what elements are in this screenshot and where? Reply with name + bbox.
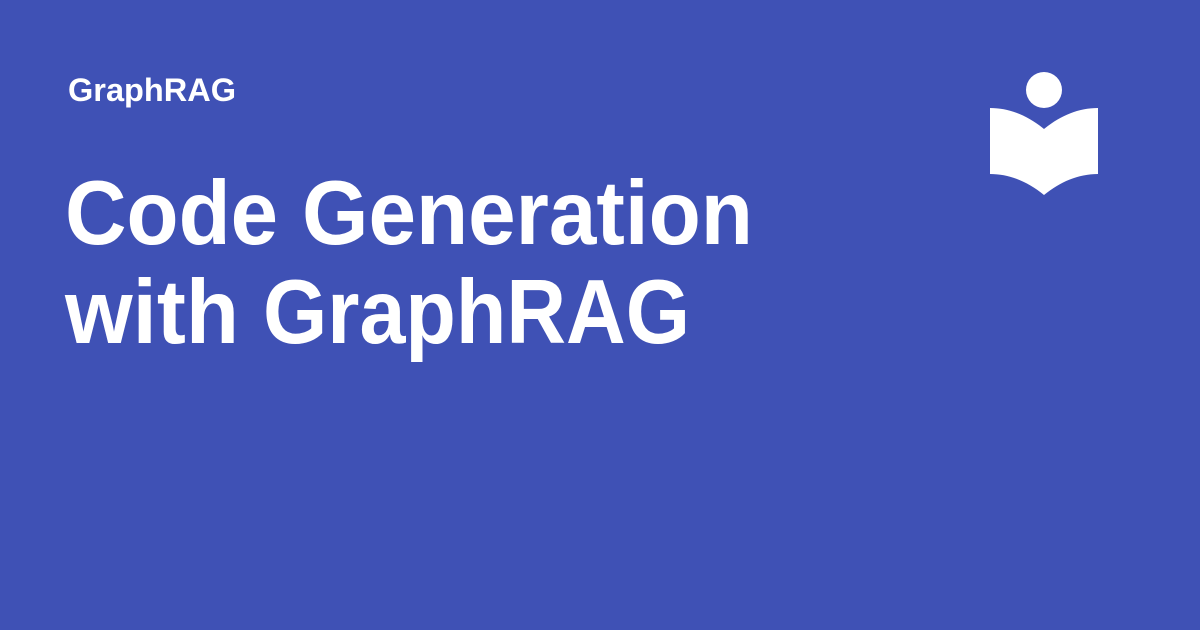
site name: GraphRAG xyxy=(68,72,236,108)
title: with xyxy=(64,262,239,363)
icon: reader with open book xyxy=(990,72,1098,195)
title: Code xyxy=(65,163,278,264)
title: GraphRAG xyxy=(263,262,690,363)
title: Generation xyxy=(302,163,753,264)
title xyxy=(64,163,753,363)
